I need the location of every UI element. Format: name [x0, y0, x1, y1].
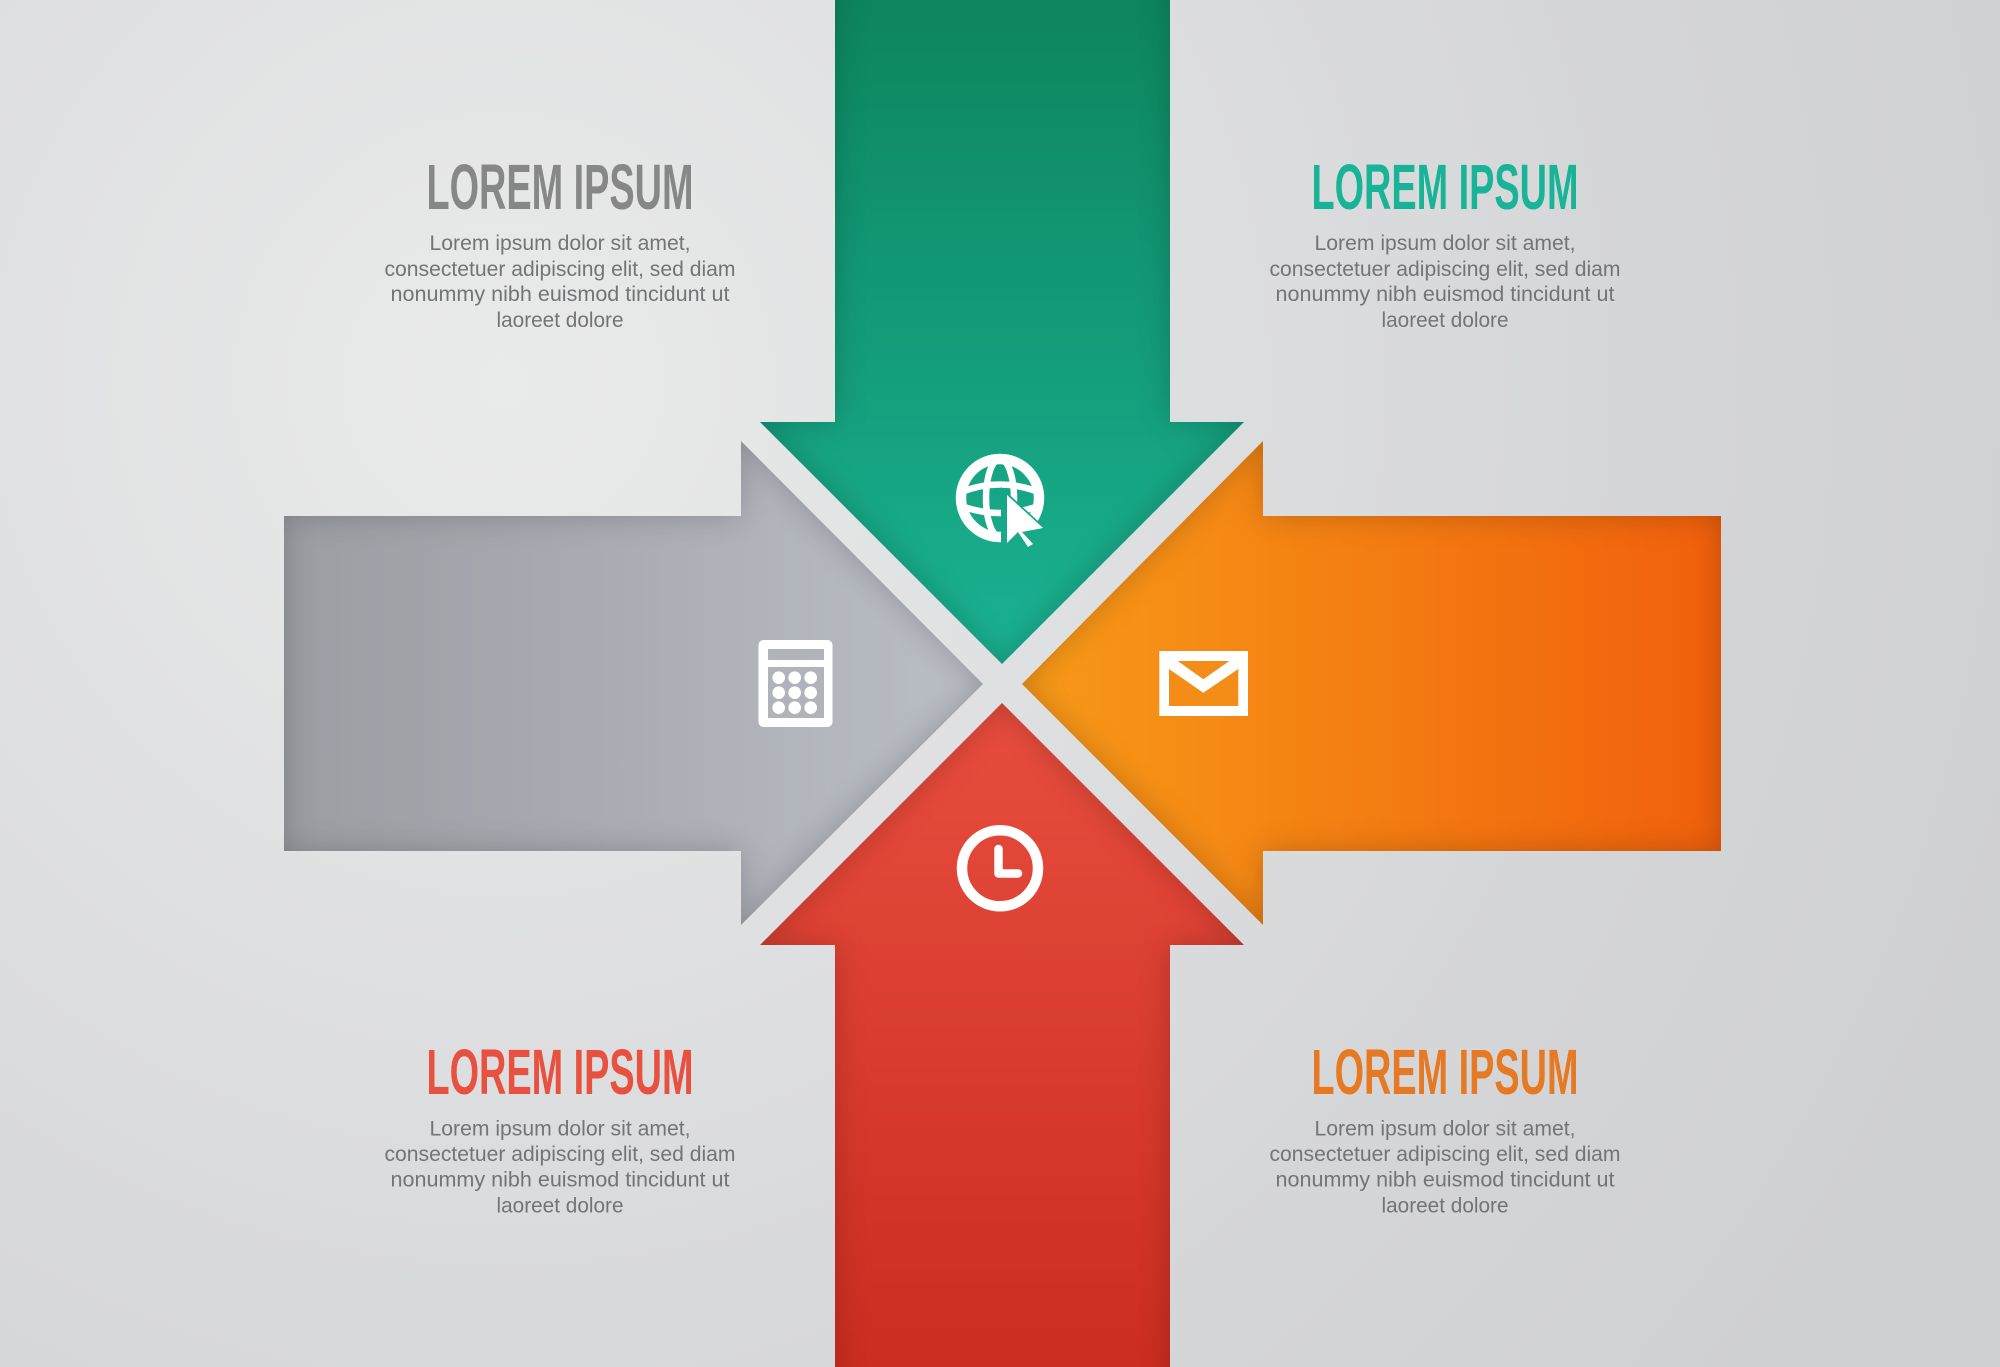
arrow: red pointing up	[760, 703, 1244, 1367]
icon: globe with cursor	[961, 459, 1043, 547]
text block: bottom right: nonummy nibh euismod tincidunt ut	[1276, 1168, 1615, 1192]
text block: top left: consectetuer adipiscing elit, sed diam	[384, 257, 736, 281]
panel: top right text	[1270, 151, 1620, 332]
icon: clock	[962, 830, 1038, 906]
heading: top left: LOREM IPSUM	[426, 151, 694, 223]
text block: bottom left: nonummy nibh euismod tincidunt ut	[390, 1168, 730, 1192]
text block: top left: laoreet dolore	[496, 308, 624, 332]
text block: bottom left: Lorem ipsum dolor sit amet,	[430, 1116, 690, 1140]
text block: top left: nonummy nibh euismod tincidunt ut	[390, 282, 730, 306]
icon: envelope	[1159, 651, 1248, 716]
text block: top right: nonummy nibh euismod tincidunt ut	[1276, 282, 1615, 306]
text block: bottom right	[1270, 1116, 1620, 1218]
arrow: orange pointing left	[1022, 441, 1721, 925]
text block: bottom right: consectetuer adipiscing elit, sed diam	[1270, 1142, 1620, 1166]
arrow: gray pointing right	[284, 441, 983, 925]
text block: top left	[384, 231, 736, 332]
panel: bottom right text	[1270, 1036, 1620, 1218]
arrow: green pointing down	[760, 0, 1244, 664]
text block: bottom right: laoreet dolore	[1382, 1194, 1508, 1218]
text block: top left: Lorem ipsum dolor sit amet,	[430, 231, 690, 255]
text block: top right: Lorem ipsum dolor sit amet,	[1314, 231, 1576, 255]
text block: top right	[1270, 231, 1620, 332]
text block: bottom left	[384, 1116, 736, 1218]
text block: top right: consectetuer adipiscing elit, sed diam	[1270, 257, 1620, 281]
panel: top left text	[384, 151, 736, 332]
heading: bottom left: LOREM IPSUM	[426, 1036, 694, 1108]
text block: top right: laoreet dolore	[1382, 308, 1508, 332]
text block: bottom left: laoreet dolore	[496, 1194, 624, 1218]
panel: bottom left text	[384, 1036, 736, 1218]
heading: top right: LOREM IPSUM	[1312, 151, 1578, 223]
icon: calculator	[758, 640, 832, 727]
heading: bottom right: LOREM IPSUM	[1312, 1036, 1578, 1108]
text block: bottom right: Lorem ipsum dolor sit amet,	[1314, 1116, 1576, 1140]
text block: bottom left: consectetuer adipiscing elit, sed diam	[384, 1142, 736, 1166]
